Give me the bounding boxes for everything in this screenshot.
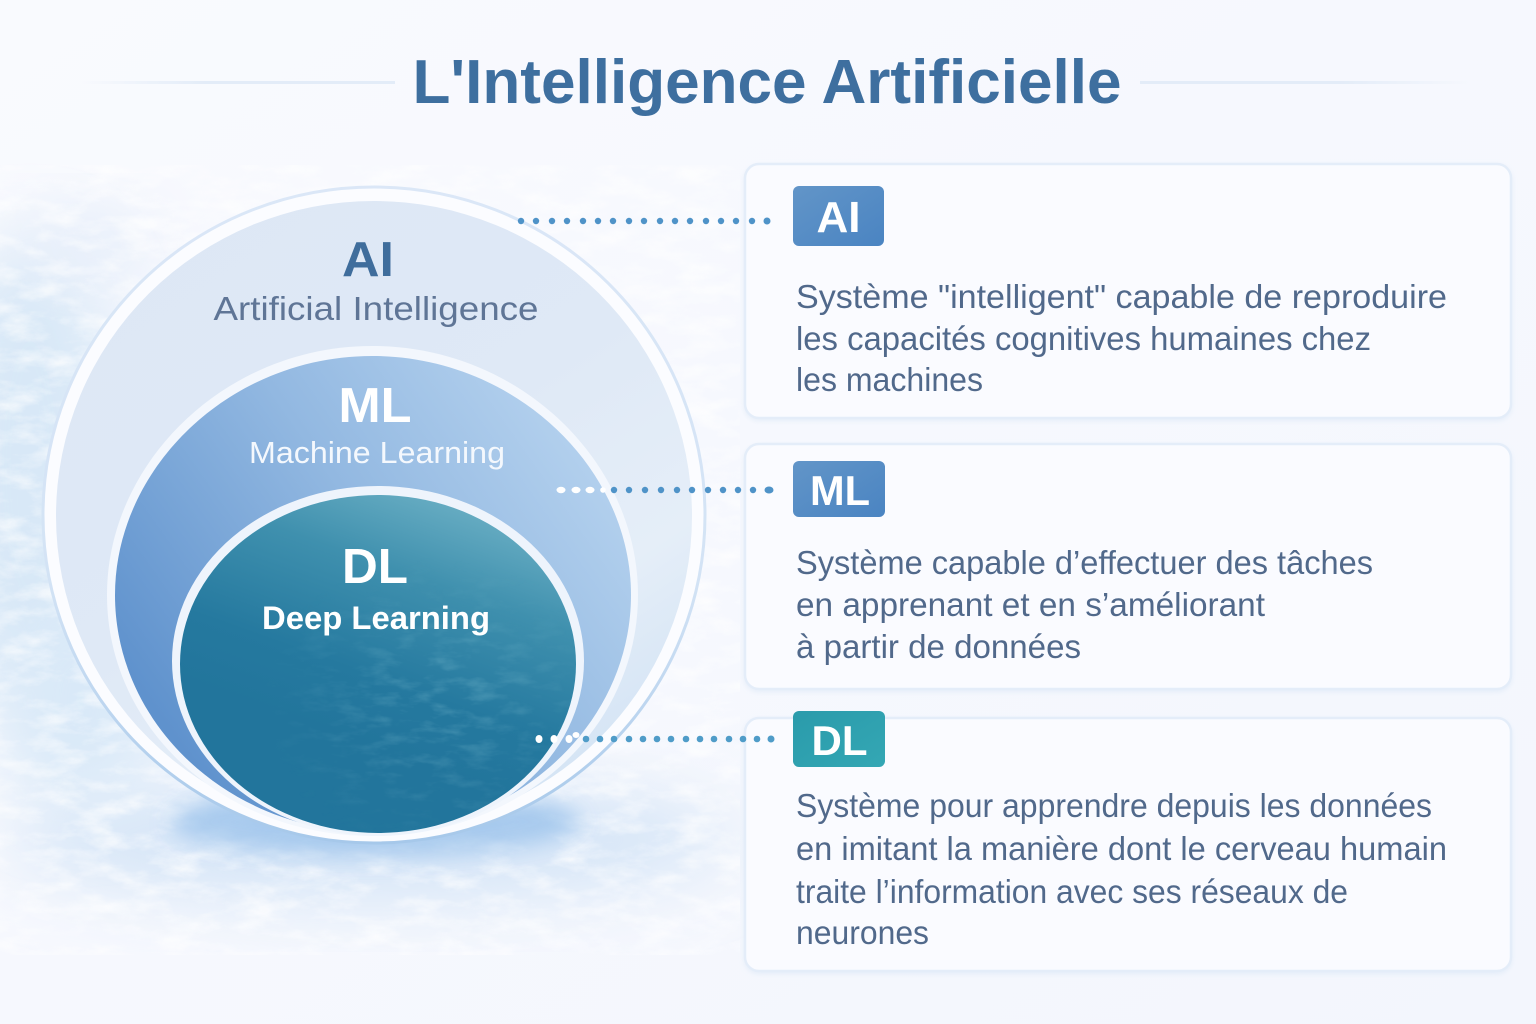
label: DL: Deep Learning: [262, 600, 490, 636]
circle: AI: [43, 187, 705, 843]
description: ML: à partir de données: [796, 628, 1081, 665]
label: DL: DL: [342, 540, 408, 594]
badge: ML: [793, 461, 885, 517]
connector: DL: [536, 732, 774, 743]
label: ML: ML: [338, 379, 412, 433]
label: ML: Machine Learning: [249, 435, 505, 470]
label: AI: Artificial Intelligence: [214, 290, 538, 327]
title rules: [80, 81, 1470, 84]
description: AI: Système "intelligent" capable de reproduire: [796, 278, 1447, 315]
card: ML: [745, 444, 1511, 689]
description: DL: neurones: [796, 914, 929, 951]
badge: AI: [793, 186, 884, 246]
circle: DL: [172, 486, 584, 836]
label: AI: AI: [342, 233, 394, 287]
nested circle diagram: [43, 187, 705, 856]
description: DL: en imitant la manière dont le cerveau humain: [796, 830, 1447, 867]
description: ML: en apprenant et en s’améliorant: [796, 586, 1265, 623]
description: DL: traite l’information avec ses réseaux de: [796, 873, 1348, 910]
circle: ML: [107, 346, 638, 836]
description: DL: [796, 787, 1447, 951]
description: ML: Système capable d’effectuer des tâches: [796, 544, 1373, 581]
connector: AI: [518, 218, 770, 224]
connector: ML: [556, 486, 774, 494]
description: AI: [796, 278, 1447, 398]
badge: DL: DL: [812, 717, 868, 764]
label: ML: [249, 379, 505, 470]
label: AI: [214, 233, 538, 327]
description: ML: [796, 544, 1373, 665]
description: DL: Système pour apprendre depuis les données: [796, 787, 1432, 824]
badge: AI: AI: [816, 193, 860, 242]
card: AI: [745, 164, 1511, 418]
badge: ML: ML: [810, 467, 870, 514]
ground shadow: [170, 788, 580, 856]
title: L'Intelligence Artificielle: [412, 48, 1122, 117]
badge: DL: [793, 711, 885, 767]
label: DL: [262, 540, 490, 636]
description: AI: les machines: [796, 361, 983, 398]
description: AI: les capacités cognitives humaines chez: [796, 320, 1371, 357]
card: DL: [745, 711, 1511, 971]
